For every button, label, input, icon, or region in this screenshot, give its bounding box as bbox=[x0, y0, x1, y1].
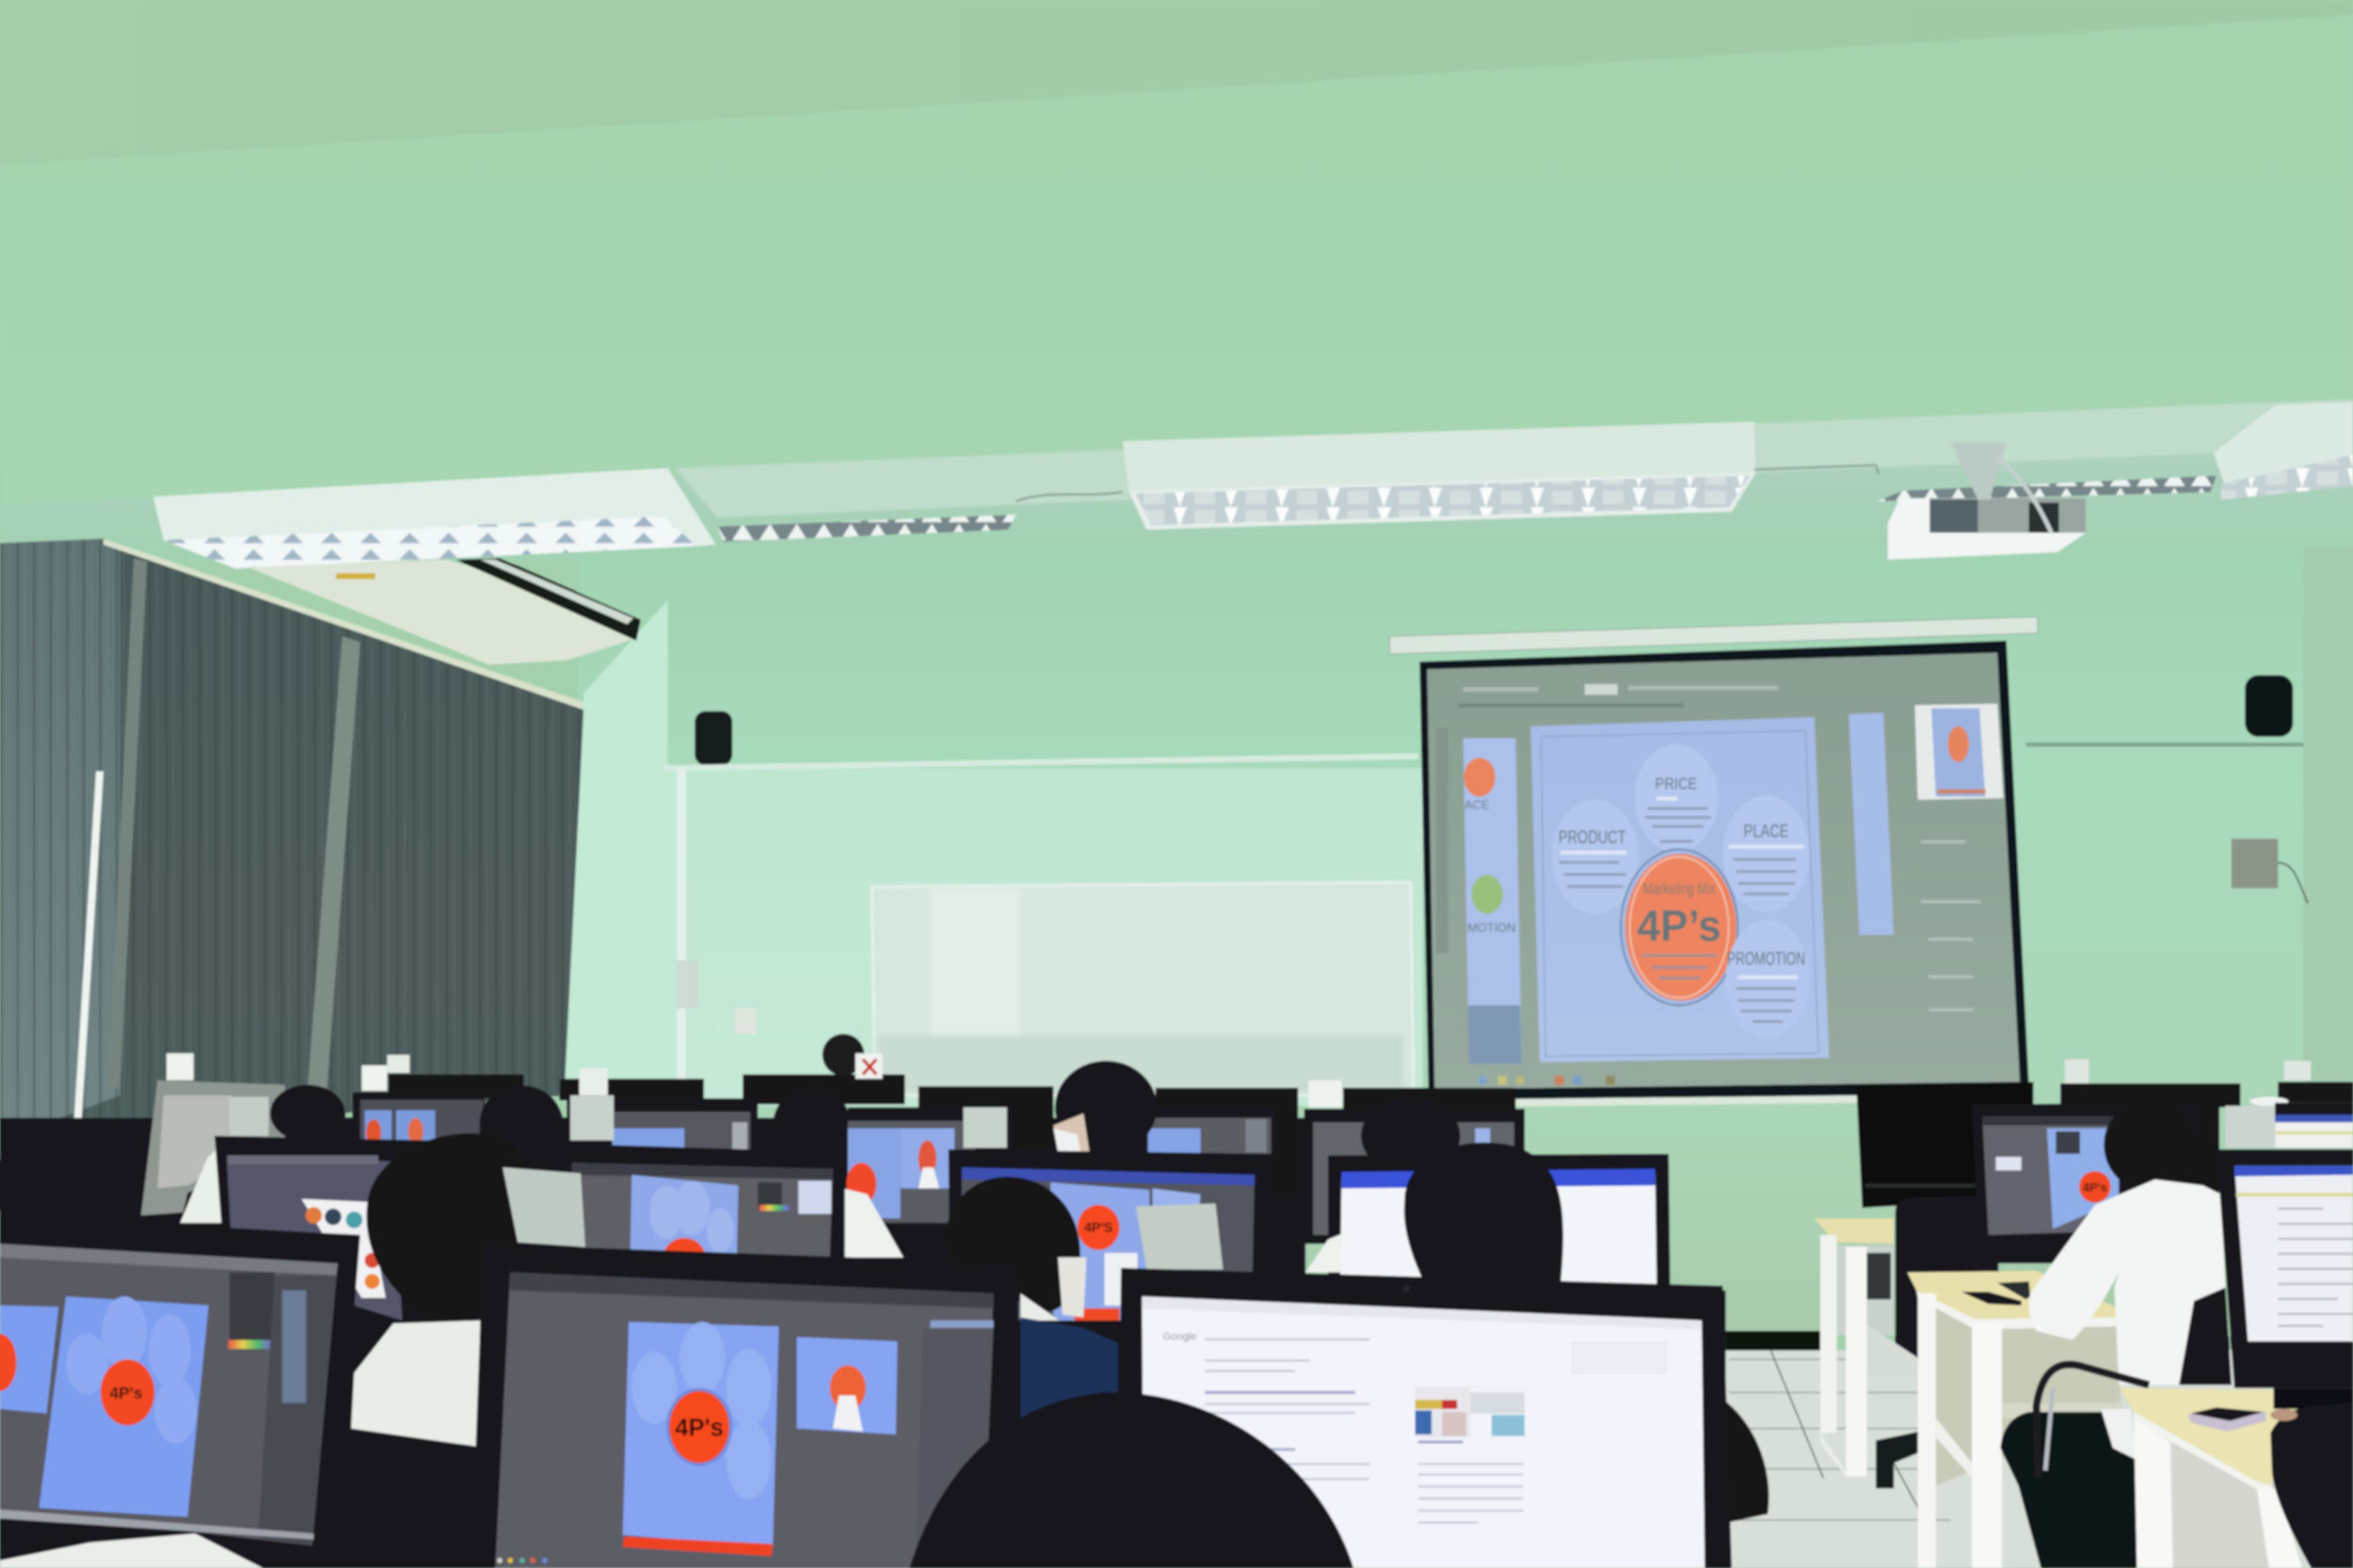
monitor screen bbox=[495, 1272, 993, 1568]
app toolbar bbox=[0, 1244, 338, 1275]
student right head bbox=[2104, 1101, 2204, 1192]
monitor middle row 3 bbox=[949, 1149, 1271, 1320]
person front centre hair bbox=[909, 1392, 1353, 1568]
right monitor with artboard: 4P's bbox=[2083, 1180, 2107, 1194]
right speaker bbox=[2245, 675, 2293, 737]
orange circle bbox=[669, 1391, 729, 1463]
projector screen bbox=[1419, 641, 2029, 1100]
second artboard orange circle bbox=[830, 1366, 866, 1411]
black monitor back right bbox=[1856, 1081, 2033, 1208]
monitor frame bbox=[1118, 1268, 1732, 1568]
wall socket bbox=[677, 960, 697, 1008]
air conditioner bbox=[248, 558, 641, 664]
left sliver labels: ACE bbox=[1465, 797, 1489, 811]
person front right arm bbox=[2270, 1388, 2353, 1568]
right artboard sliver bbox=[1849, 712, 1894, 935]
bubbles bbox=[632, 1322, 772, 1499]
second artboard bbox=[797, 1336, 897, 1434]
front centre monitor bbox=[472, 1244, 1022, 1568]
tent with red cross bbox=[856, 1053, 883, 1079]
whiteboard bbox=[872, 882, 1414, 1096]
heading promotion: PROMOTION bbox=[1727, 950, 1805, 969]
phone on desk 3 bbox=[2188, 1407, 2266, 1432]
far right monitor white bbox=[2217, 1149, 2353, 1388]
paper tents back bbox=[167, 1053, 2311, 1148]
beam lower lip bbox=[675, 399, 2353, 518]
window curtain bbox=[0, 538, 584, 1141]
artboard guide bbox=[1541, 730, 1818, 1056]
wall switch bbox=[735, 1008, 757, 1033]
person H navy jacket bbox=[1020, 1318, 1118, 1422]
projected app window bbox=[1427, 653, 2020, 1089]
front right monitor white bbox=[1118, 1268, 1732, 1568]
main artboard bbox=[623, 1322, 778, 1547]
icon sheet on monitor bbox=[301, 1199, 386, 1298]
person middle row G head bbox=[366, 1133, 529, 1320]
person middle row I curly head bbox=[1404, 1143, 1563, 1286]
orange circle bbox=[101, 1359, 154, 1426]
chair back desk row bbox=[1896, 1196, 1999, 1363]
right wall column bbox=[2303, 548, 2353, 1111]
person far row E bbox=[1361, 1096, 1460, 1175]
chair base bbox=[1876, 1432, 1919, 1489]
fluorescent light strip 1 bbox=[717, 515, 1016, 542]
wall control box bbox=[2232, 839, 2308, 904]
desk 1 bbox=[1815, 1219, 1918, 1477]
paper tent middle right bbox=[1136, 1204, 1223, 1270]
back wall bbox=[578, 548, 2353, 1336]
chair back front student bbox=[2179, 1288, 2232, 1385]
monitor far row 3 bbox=[568, 1098, 758, 1159]
bubble promotion bbox=[1726, 920, 1810, 1040]
layers panel bbox=[282, 1290, 306, 1403]
navigator panel bbox=[1914, 704, 2004, 800]
wall conduit bbox=[677, 770, 686, 1085]
person far row C bbox=[773, 1086, 851, 1164]
4P's text: 4P's bbox=[675, 1416, 724, 1442]
navigator strip bbox=[1937, 790, 1985, 793]
monitor far row 5 bbox=[1141, 1108, 1275, 1154]
projector screen casing bbox=[1389, 616, 2038, 654]
place icon orange bbox=[1464, 758, 1496, 797]
swatch panel bbox=[230, 1272, 275, 1348]
monitor middle row 2 bbox=[557, 1144, 845, 1277]
sale icon green bbox=[1471, 874, 1503, 914]
heading price: PRICE bbox=[1656, 775, 1697, 793]
fluorescent light strip 2 bbox=[1878, 475, 2217, 501]
left artboard bbox=[0, 1305, 58, 1414]
far row monitor backs bbox=[389, 1074, 2353, 1192]
paper tent middle left bbox=[503, 1167, 585, 1247]
desk 3 bbox=[2119, 1388, 2311, 1568]
taskbar bbox=[1478, 1076, 1615, 1085]
right monitor with artboard bbox=[1972, 1103, 2199, 1263]
toolbar bbox=[508, 1272, 993, 1308]
monitor screen bbox=[0, 1244, 338, 1545]
student shirt tail bbox=[2101, 1409, 2137, 1460]
chair chrome arm bbox=[2045, 1388, 2053, 1470]
person middle row H bbox=[945, 1176, 1086, 1320]
fluorescent light 2 bbox=[1123, 422, 1755, 530]
navigator orange circle bbox=[1948, 727, 1969, 762]
browser toolbar line bbox=[1142, 1296, 1702, 1330]
search logo: Google bbox=[1163, 1332, 1197, 1343]
keyboard on desk bbox=[1997, 1281, 2030, 1300]
left artboard orange bbox=[0, 1334, 17, 1391]
bubble place bbox=[1722, 795, 1810, 912]
ceiling underside bbox=[0, 402, 2353, 563]
screen black frame bbox=[1419, 641, 2029, 1100]
person far row B bbox=[479, 1085, 564, 1164]
wall baseboard bbox=[1726, 1331, 1823, 1351]
right panel bbox=[916, 1328, 993, 1568]
person right of front centre dark jacket bbox=[1726, 1401, 1769, 1523]
cable on ceiling bbox=[1016, 465, 1879, 501]
navigator artboard bbox=[1931, 708, 1985, 797]
silver monitor far left bbox=[141, 1080, 285, 1215]
floor tile lines bbox=[1729, 1351, 1951, 1520]
projector bbox=[1888, 442, 2086, 560]
central circle outer ring bbox=[1621, 849, 1737, 1005]
monitor middle row far left bbox=[0, 1126, 121, 1185]
person front left row F bbox=[0, 1137, 124, 1233]
person far row A bbox=[180, 1085, 345, 1223]
taskbar dots bbox=[497, 1558, 548, 1563]
silver lower edge bbox=[0, 1510, 313, 1540]
browser screen bbox=[1142, 1296, 1705, 1568]
front left monitor bbox=[0, 1215, 360, 1568]
heading 4P's: 4P’s bbox=[1637, 902, 1721, 951]
fluorescent light 3 bbox=[2214, 402, 2353, 500]
bubble white subheads bbox=[1561, 797, 1803, 979]
left sliver dark footer bbox=[1467, 1005, 1522, 1064]
artboard bbox=[39, 1296, 209, 1517]
student right shirt bbox=[2029, 1179, 2225, 1385]
heading product: PRODUCT bbox=[1559, 828, 1626, 848]
bubble price bbox=[1634, 744, 1719, 853]
paper tent top right bbox=[2225, 1106, 2275, 1148]
left sliver labels bbox=[1465, 797, 1515, 935]
app toolbar bbox=[1436, 684, 1981, 1012]
monitor middle row 3: 4P'S bbox=[1084, 1221, 1112, 1236]
monitor frame bbox=[0, 1215, 360, 1568]
color swatch strip bbox=[228, 1340, 273, 1349]
search result lines bbox=[1205, 1338, 1523, 1524]
monitor far row 6 bbox=[1305, 1109, 1525, 1244]
bar below screen bbox=[1429, 1096, 1861, 1108]
4P's text: 4P's bbox=[109, 1384, 143, 1402]
heading place: PLACE bbox=[1744, 823, 1789, 842]
person left of I shirt bbox=[1305, 1233, 1343, 1272]
desk 2 bbox=[1907, 1271, 2121, 1568]
chair arm bbox=[2037, 1365, 2149, 1478]
monitor middle row 1 bbox=[215, 1136, 427, 1320]
monitor frame bbox=[472, 1244, 1022, 1568]
dark underlay of desk rows bbox=[0, 1118, 1726, 1568]
orange circle ring bbox=[666, 1388, 732, 1466]
monitor far row 4 bbox=[846, 1108, 1013, 1227]
teacher head bbox=[823, 1033, 864, 1076]
whiteboard wall panel bbox=[687, 768, 1422, 1106]
monitor top right white bbox=[2275, 1103, 2353, 1148]
main artboard bbox=[1530, 717, 1830, 1063]
left speaker bbox=[695, 712, 732, 765]
person front left shirt bbox=[0, 1533, 263, 1568]
panel darker bbox=[258, 1275, 336, 1545]
bubble product bbox=[1552, 800, 1639, 914]
heading marketing mix: Marketing Mix bbox=[1643, 879, 1716, 898]
person C white shirt bbox=[843, 1189, 904, 1257]
upper wall beam bbox=[0, 15, 2353, 504]
fluorescent light 1 bbox=[153, 468, 716, 568]
bubble body text lines bbox=[1560, 808, 1796, 1023]
bubbles bbox=[66, 1296, 197, 1444]
floor bbox=[1726, 1351, 2353, 1568]
central circle inner line bbox=[1630, 856, 1729, 998]
left artboard sliver bbox=[1464, 738, 1522, 1064]
figure in second artboard bbox=[833, 1396, 863, 1432]
monitor far row 2 bbox=[353, 1093, 485, 1152]
student pants bbox=[2000, 1412, 2137, 1568]
red footer strip bbox=[623, 1537, 773, 1556]
person G shirt bbox=[351, 1320, 480, 1447]
person D head and mask bbox=[1053, 1061, 1157, 1154]
knowledge panel box bbox=[1573, 1343, 1666, 1373]
phone on desk bbox=[1961, 1292, 2022, 1305]
central orange circle bbox=[1625, 854, 1737, 1000]
image thumbnails bbox=[1416, 1386, 1525, 1437]
webcam dot bbox=[1402, 1285, 1410, 1292]
wall rail bbox=[664, 753, 1418, 771]
side wall beside curtain bbox=[564, 600, 687, 1096]
wall rail right bbox=[2025, 743, 2303, 746]
desk mouse on back row bbox=[2249, 1096, 2288, 1106]
monitor middle row 4 white bbox=[1328, 1154, 1671, 1288]
left sliver labels: MOTION bbox=[1467, 920, 1515, 935]
ceiling strip bbox=[0, 0, 2353, 165]
